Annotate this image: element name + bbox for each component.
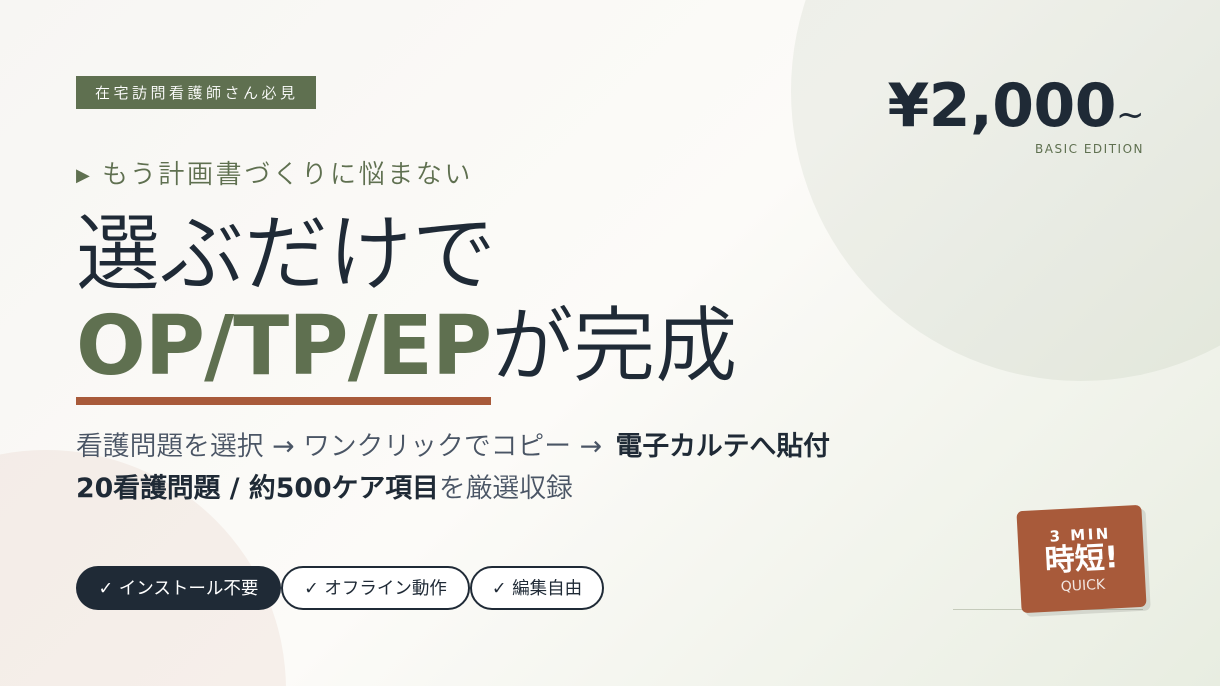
badge line 3: QUICK	[1060, 577, 1105, 595]
tag: target audience	[76, 76, 316, 109]
badge line 1: 3 MIN	[1049, 524, 1111, 546]
headline line 1: 選ぶだけで	[76, 205, 496, 303]
tag: target audience: 在宅訪問看護師さん必見	[95, 84, 299, 102]
subheading: ▶	[76, 165, 90, 186]
price	[887, 71, 1144, 156]
edition label: BASIC EDITION	[1035, 142, 1144, 156]
decorative circle: bottom left	[0, 450, 286, 686]
description text	[76, 431, 830, 504]
price amount: ¥2,000~	[887, 71, 1144, 141]
pill: no install: ✓ インストール不要	[99, 579, 258, 599]
badge: 3 min quick	[1016, 505, 1147, 613]
headline underline	[76, 397, 491, 405]
description text: 20看護問題 / 約500ケア項目を厳選収録	[76, 473, 573, 504]
pill: offline: ✓ オフライン動作	[304, 579, 447, 599]
pill: no install	[76, 566, 281, 610]
headline line 2: OP/TP/EPが完成	[76, 299, 737, 394]
subheading: もう計画書づくりに悩まない	[102, 160, 473, 190]
pill: free editing: ✓ 編集自由	[492, 579, 582, 599]
headline	[76, 205, 737, 394]
decorative circle: top right	[791, 0, 1220, 381]
divider line near badge	[953, 609, 1143, 610]
description text: 看護問題を選択 → ワンクリックでコピー → 電子カルテへ貼付	[76, 431, 830, 462]
pill: free editing	[470, 566, 604, 610]
pill: offline	[281, 566, 470, 610]
badge line 2: 時短!	[1044, 540, 1119, 579]
feature pills	[76, 566, 604, 610]
